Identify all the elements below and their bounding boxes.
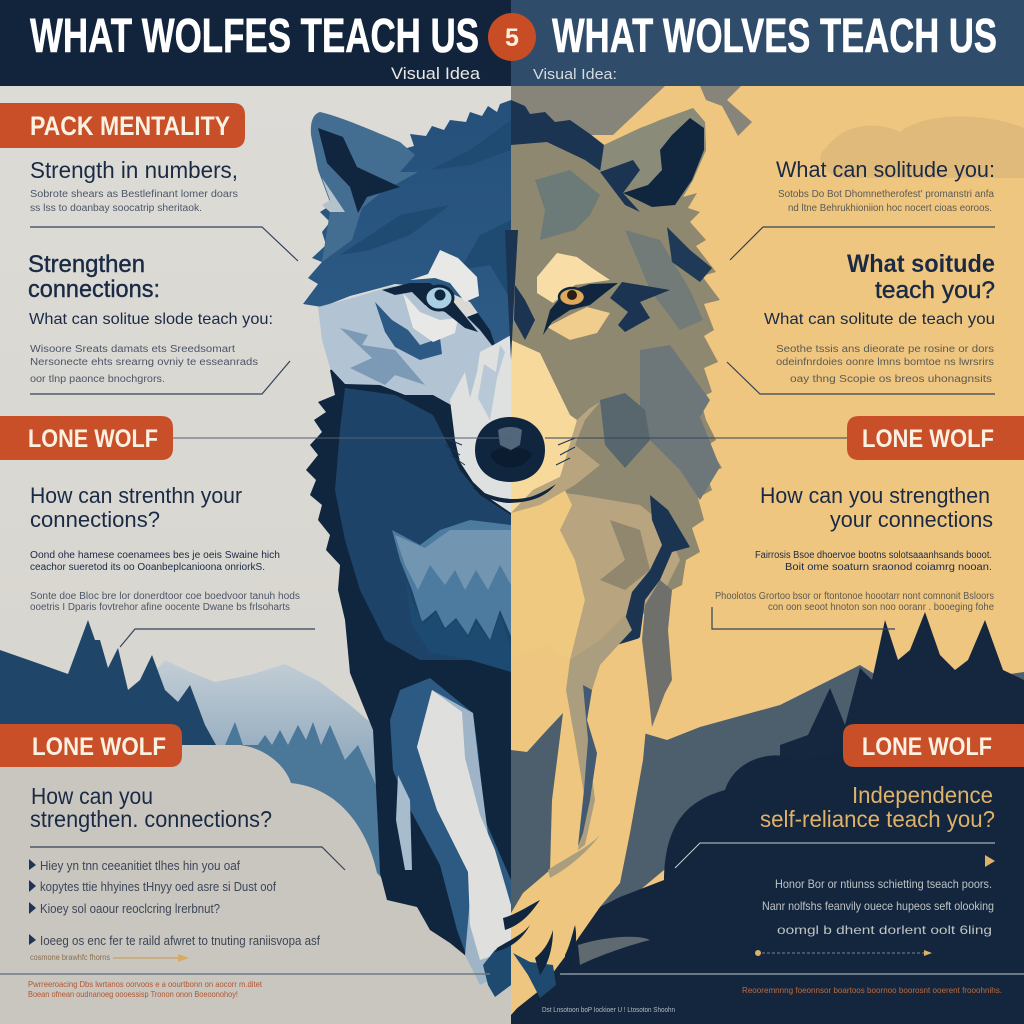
tag — [0, 103, 245, 148]
panel: lone wolf two, left: strengthen. connections? — [30, 806, 272, 832]
panel: lone wolf one, left: LONE WOLF — [28, 425, 158, 453]
caption with arrow: cosmone brawhfc fhorns — [30, 953, 110, 962]
wolf whiskers — [445, 438, 575, 465]
panel: lone wolf one, right: LONE WOLF — [862, 425, 994, 453]
subtitle left: Visual Idea — [391, 64, 481, 83]
panel: lone wolf one, right: Phoolotos Grortoo bsor or ftontonoe hoootarr nont comnonit Bsloors — [715, 591, 994, 602]
wolf mouth — [472, 484, 556, 503]
title left: WHAT WOLFES TEACH US — [30, 10, 479, 63]
list: oomgl b dhent dorlent oolt 6ling — [777, 923, 992, 937]
navy foreground hill — [511, 722, 1024, 1024]
bullet list: Kioey sol oaour reoclcring lrerbnut? — [40, 901, 220, 916]
body text: Sotobs Do Bot Dhomnetherofest' promanstri anfa — [778, 189, 994, 200]
body text: Sobrote shears as Bestlefinant lomer doars — [30, 189, 238, 200]
dotted arrow — [755, 950, 932, 956]
panel: lone wolf two, left — [0, 724, 490, 999]
bullet list — [29, 858, 320, 948]
wolf right head fur patches — [535, 170, 720, 660]
wolf left brow and eye patch — [410, 250, 479, 302]
number badge — [488, 13, 536, 61]
heading: How can strenthn your — [30, 483, 242, 508]
right mountain range — [511, 665, 1024, 1000]
wolf right head base — [511, 100, 722, 660]
list: Honor Bor or ntiunss schietting tseach poors. — [775, 877, 992, 891]
wolf right paw claws — [495, 900, 576, 998]
right background shapes — [511, 86, 1024, 1024]
bullet list: kopytes ttie hhyines tHnyy oed asre si Dust oof — [40, 879, 276, 894]
wolf left fur streaks — [340, 120, 511, 300]
panel: solitude, right: nd ltne Behrukhioniion hoc nocert cioas eoroos. — [788, 203, 992, 214]
wolf left neck mane — [335, 388, 511, 668]
subheading: What can solitute de teach you — [764, 311, 995, 328]
heading: What soitude — [847, 250, 995, 278]
wolf center seam — [505, 230, 518, 360]
wolf left silhouette — [306, 300, 511, 970]
wolf right muzzle — [511, 340, 577, 513]
panel: solitude, right: teach you? — [875, 277, 995, 304]
panel: pack mentality — [0, 103, 298, 394]
heading: Strength in numbers, — [30, 157, 238, 183]
panel: lone wolf one, left: ceachor sueretod its oo Ooanbeplcanioona onriorkS. — [30, 562, 265, 573]
panel: lone wolf two, right: Dst Lnsotoon boP Iockioer U ! Ltosoton Shoohn — [542, 1005, 675, 1014]
wolf right eye — [543, 283, 618, 335]
body text: Oond ohe hamese coenamees bes je oeis Swaine hich — [30, 550, 280, 561]
wolf right leg — [511, 638, 647, 1013]
list — [762, 855, 995, 937]
wolf left head blue — [303, 100, 511, 390]
wolf nose — [475, 417, 545, 482]
wolf right dark cap — [511, 100, 604, 172]
panel: solitude, right — [727, 157, 995, 394]
number badge: 5 — [505, 24, 519, 52]
panel: pack mentality: connections: — [28, 276, 160, 303]
wolf left ear — [311, 112, 418, 262]
bullet list: Ioeeg os enc fer te raild afwret to tnuting raniisvopa asf — [40, 933, 320, 948]
cloud — [820, 116, 1024, 178]
footnote: Pwrreeroacing Dbs lwrtanos oorvoos e a oourtbonn on aocorr m.ditet — [28, 979, 263, 989]
panel: lone wolf two, right — [542, 724, 1024, 1014]
panel: pack mentality: ss lss to doanbay soocatrip sheritaok. — [30, 203, 202, 214]
tag — [847, 416, 1024, 460]
wolf right cheek marking — [610, 282, 670, 332]
panel: solitude, right: oay thng Scopie os breos uhonagnsits — [790, 374, 992, 385]
footnote: Reooremnnng foeonnsor boartoos boornoo boorosnt ooerent frooohnihs. — [742, 985, 1002, 995]
header bar right — [511, 0, 1024, 86]
tag — [0, 724, 182, 767]
wolf left eye — [382, 283, 478, 332]
panel: lone wolf two, left: LONE WOLF — [32, 733, 166, 761]
gray peak behind the ears — [511, 86, 665, 135]
panel: solitude, right: odeinfnrdoies oonre lmns bomtoe ns lwrsrirs — [776, 357, 994, 368]
panel: lone wolf one, left: Sonte doe Bloc bre lor donerdtoor coe boedvoor tanuh hods — [30, 591, 300, 602]
wolf illustration — [303, 100, 722, 1013]
panel: lone wolf two, right: self-reliance teach you? — [760, 806, 995, 832]
panel: lone wolf one, right: Boit ome soaturn sraonod coiamrg nooan. — [785, 562, 992, 573]
header bar left — [0, 0, 511, 86]
panel: pack mentality: oor tlnp paonce bnochgrors. — [30, 374, 165, 385]
wolf left muzzle — [450, 335, 511, 513]
panel: left background — [0, 86, 511, 1024]
wolf left leg — [390, 678, 511, 975]
tag — [843, 724, 1024, 767]
wolf left paw — [483, 945, 511, 997]
heading: How can you — [31, 783, 153, 809]
heading: Strengthen — [28, 251, 145, 278]
wolf right chest — [511, 480, 585, 660]
subheading: What can solitue slode teach you: — [29, 311, 273, 328]
panel: right background — [511, 86, 1024, 1024]
heading: Independence — [852, 782, 993, 808]
tag — [0, 416, 173, 460]
wolf left chest fur — [392, 520, 511, 640]
panel: lone wolf two, right: LONE WOLF — [862, 733, 992, 761]
body text: Seothe tssis ans dieorate pe rosine or dors — [776, 344, 994, 355]
panel: pack mentality: Nersonecte ehts srearng ovniy te esseanrads — [30, 357, 258, 368]
left mountain landscape — [0, 620, 385, 880]
panel: lone wolf one, left — [0, 416, 510, 647]
panel: pack mentality: PACK MENTALITY — [30, 111, 230, 141]
wolf left cheek — [318, 286, 511, 450]
panel: lone wolf two, left: Boean ofnean oudnanoeg oooessisp Tronon onon Boeoonohoy! — [28, 989, 238, 999]
body text: Wisoore Sreats damats ets Sreedsomart — [30, 344, 235, 355]
heading: How can you strengthen — [760, 483, 990, 508]
bullet list: Hiey yn tnn ceeanitiet tlhes hin you oaf — [40, 858, 240, 873]
left bottom cloud panel — [0, 745, 511, 1024]
wolf right shoulder stripe — [590, 495, 690, 690]
caption with arrow — [30, 953, 189, 962]
panel: lone wolf one, right — [545, 416, 1024, 629]
panel: lone wolf one, left: ooetris I Dparis fovtrehor afine oocente Dwane bs frlsoharts — [30, 602, 290, 613]
body text: Fairrosis Bsoe dhoervoe bootns solotsaaanhsands booot. — [755, 550, 992, 561]
panel: lone wolf one, left: connections? — [30, 507, 160, 532]
subtitle right: Visual Idea: — [533, 66, 617, 83]
wolf right ear — [600, 108, 706, 205]
panel: lone wolf one, right: con oon seoot hnoton son noo ooranr . booeging fohe — [768, 602, 994, 613]
panel: lone wolf one, right: your connections — [830, 507, 993, 532]
list: Nanr nolfshs feanvily ouece hupeos seft olooking — [762, 899, 994, 913]
wolf right brow and eye patch — [537, 253, 610, 303]
heading: What can solitude you: — [776, 157, 995, 182]
